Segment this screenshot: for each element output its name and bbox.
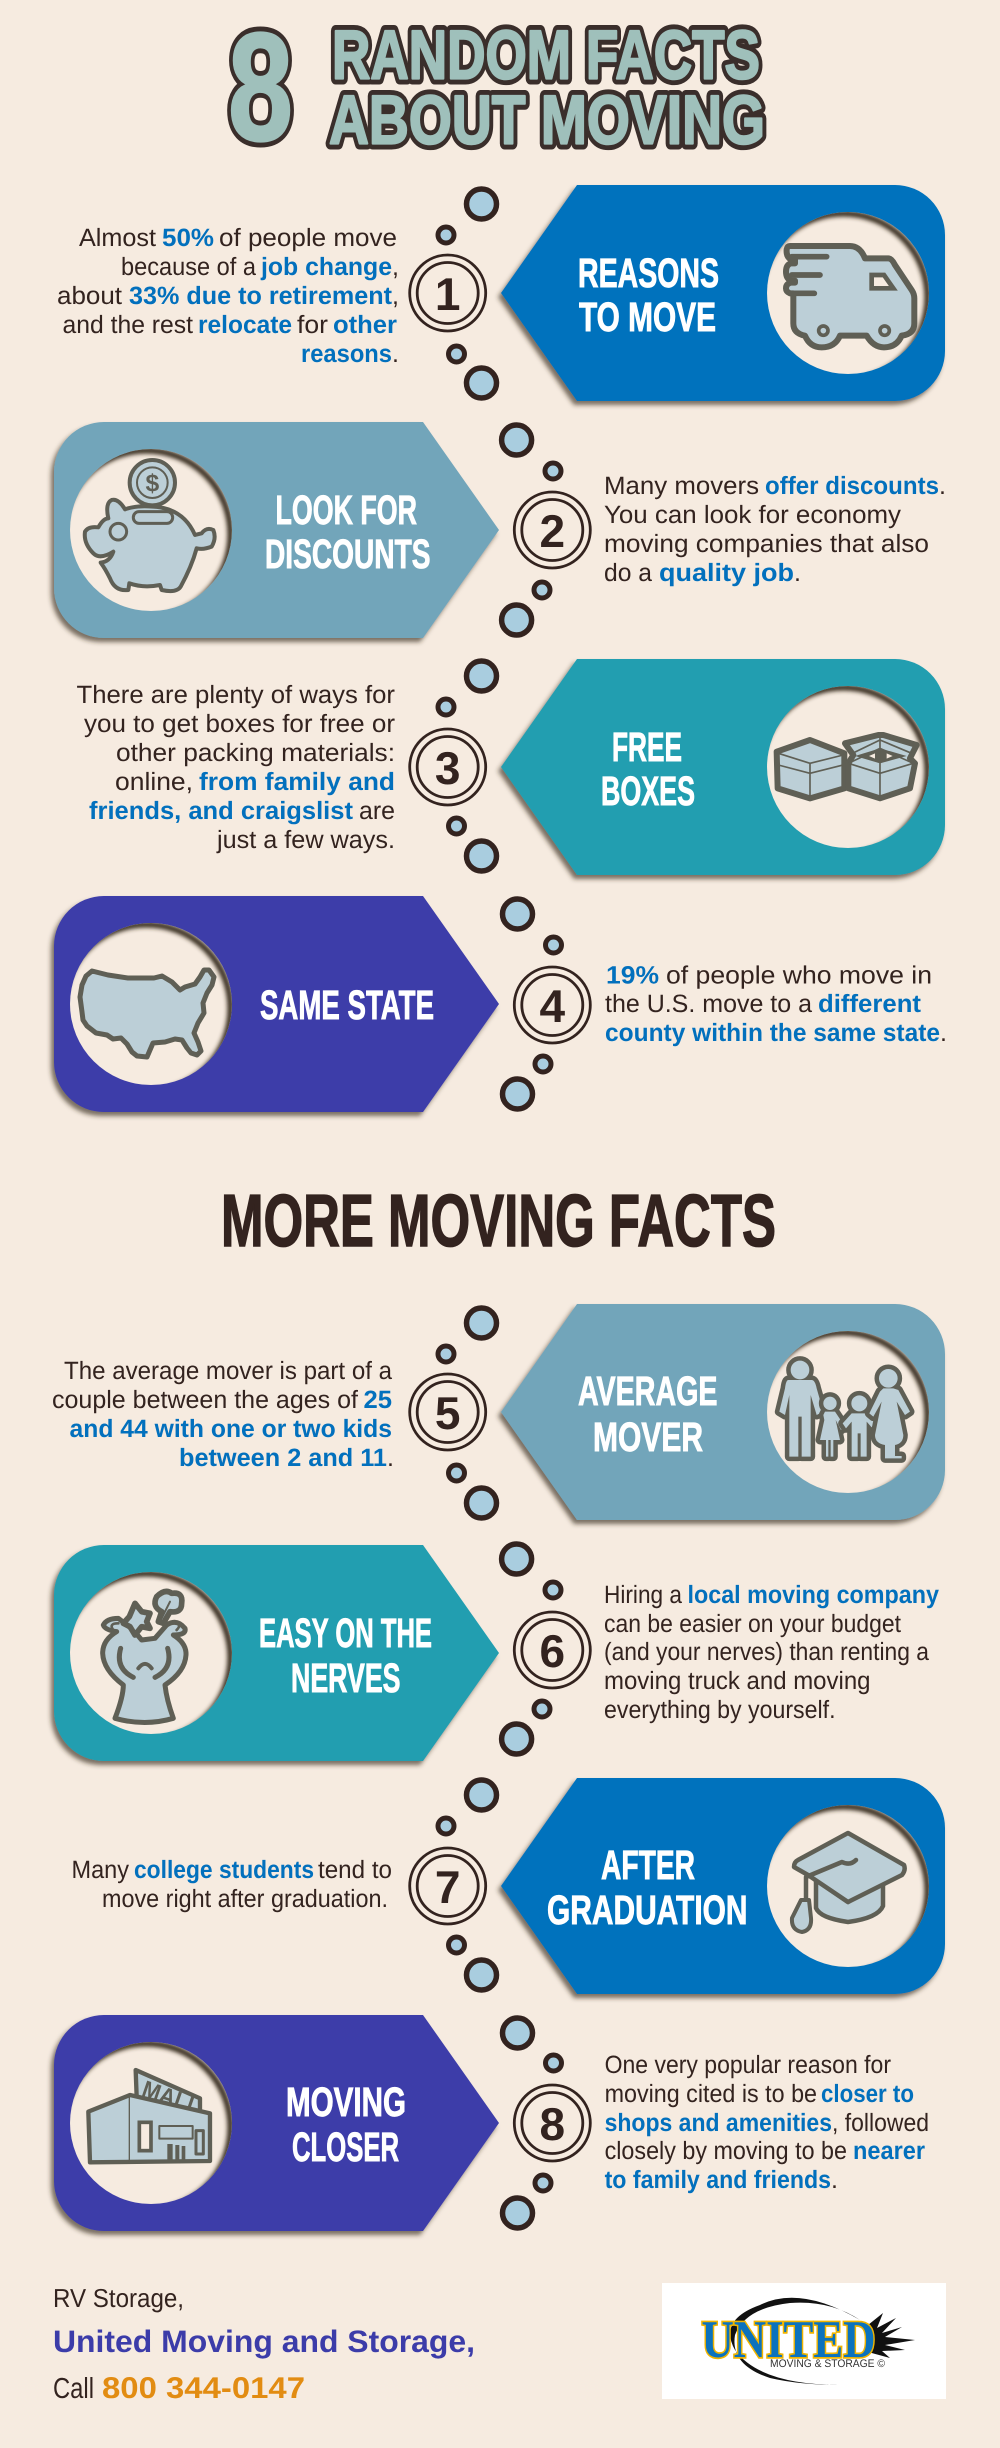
connector bubbles [502, 2018, 562, 2228]
panel heading: TO MOVE [579, 294, 716, 340]
number badge 4: 4 [540, 980, 566, 1032]
text block: You can look for economy [604, 501, 902, 529]
text block: between 2 and 11 [179, 1444, 387, 1472]
text block: moving truck and moving [604, 1667, 870, 1695]
icon: piggy bank: $ [145, 469, 159, 497]
text block: do a [604, 559, 652, 587]
icon: boxes [777, 735, 917, 798]
text block: , [392, 253, 399, 281]
text block: local moving company [688, 1581, 939, 1609]
icon hole [760, 1331, 929, 1500]
text block: quality job [659, 559, 794, 587]
number badge 5: 5 [435, 1387, 460, 1439]
footer contact text: RV Storage, [53, 2283, 184, 2313]
title numeral 8: 8 [228, 1, 293, 173]
text block [604, 1581, 939, 1724]
text block: closely by moving to be [605, 2137, 847, 2165]
connector bubbles [438, 1308, 496, 1518]
text block: relocate [198, 311, 292, 339]
footer contact text: Call [53, 2373, 94, 2405]
text block: moving companies that also [604, 530, 929, 558]
logo: United Moving and Storage: MOVING & STORAGE © [770, 2358, 885, 2370]
logo: United Moving and Storage: UNITED [702, 2311, 876, 2369]
text block: couple between the ages of [52, 1386, 358, 1414]
text block: . [940, 1019, 947, 1047]
icon: mall building: MALL [139, 2075, 204, 2120]
footer contact text: United Moving and Storage, [53, 2324, 475, 2359]
panel heading: BOXES [601, 768, 695, 814]
text block: nearer [853, 2137, 925, 2165]
icon hole [62, 2042, 232, 2212]
icon hole [760, 686, 929, 856]
panel heading [601, 724, 695, 814]
text block: friends, and craigslist [89, 797, 354, 825]
icon: stressed person [103, 1591, 186, 1722]
text block: reasons [301, 340, 392, 368]
connector bubbles [502, 425, 561, 635]
text block [604, 472, 946, 587]
text block: Almost [79, 224, 156, 252]
number badge 2 [514, 492, 590, 568]
number badge 8 [514, 2085, 590, 2161]
text block: 19% [606, 962, 659, 990]
text block: 50% [162, 224, 214, 252]
fact 8: moving closer [54, 2015, 929, 2231]
text block: offer discounts [765, 472, 939, 500]
icon: mall building [88, 2070, 210, 2162]
text block: you to get boxes for free or [84, 710, 395, 738]
fact 3: free boxes [76, 659, 945, 875]
icon hole [62, 449, 232, 618]
number badge 6 [514, 1612, 590, 1688]
text block: and 44 with one or two kids [70, 1415, 392, 1443]
panel heading: GRADUATION [547, 1887, 748, 1933]
text block: (and your nerves) than renting a [604, 1638, 929, 1666]
footer contact text: 800 344-0147 [102, 2372, 305, 2405]
icon hole [62, 1572, 232, 1742]
panel heading: SAME STATE [260, 982, 434, 1028]
icon hole [760, 1805, 929, 1974]
panel heading [286, 2079, 406, 2170]
text block: Many movers [604, 472, 759, 500]
text block: The average mover is part of a [64, 1357, 392, 1385]
text block: to family and friends [605, 2166, 831, 2194]
number badge 1 [410, 255, 486, 331]
panel heading [578, 250, 719, 340]
text block: . [387, 1444, 394, 1472]
number badge 6: 6 [540, 1625, 565, 1677]
icon hole [760, 212, 929, 382]
connector bubbles [438, 661, 496, 871]
text block [605, 2051, 929, 2194]
panel heading [547, 1842, 748, 1933]
text block [52, 1357, 394, 1472]
text block: . [831, 2166, 838, 2194]
text block: move right after graduation. [102, 1885, 388, 1913]
panel: same state [54, 896, 499, 1112]
fact 1: reasons to move [57, 185, 945, 401]
text block: different [818, 990, 922, 1018]
number badge 3 [410, 729, 486, 805]
panel heading [578, 1368, 718, 1460]
text block: the U.S. move to a [605, 990, 812, 1018]
panel: look for discounts [54, 422, 499, 638]
title line 1: RANDOM FACTS [332, 16, 760, 94]
panel: after graduation [501, 1778, 945, 1994]
panel heading [265, 487, 430, 577]
text block: college students [134, 1856, 314, 1884]
fact 6: easy on the nerves [54, 1544, 939, 1761]
icon: piggy bank [85, 460, 215, 591]
logo: United Moving and Storage [662, 2283, 946, 2399]
number badge 1: 1 [435, 268, 460, 320]
panel heading: EASY ON THE [259, 1610, 432, 1656]
text block: Many [72, 1856, 129, 1884]
text block: . [794, 559, 801, 587]
text block: everything by yourself. [604, 1696, 836, 1724]
icon: family [779, 1361, 910, 1458]
connector bubbles [438, 189, 496, 398]
title line 1: RANDOM FACTS [332, 16, 760, 94]
number badge 7 [410, 1848, 486, 1924]
text block: . [392, 340, 399, 368]
text block [72, 1856, 392, 1913]
text block: moving cited is to be [605, 2080, 817, 2108]
panel heading: AVERAGE [578, 1368, 718, 1414]
panel heading: LOOK FOR [276, 487, 417, 533]
text block [76, 681, 395, 854]
text block: One very popular reason for [605, 2051, 891, 2079]
text block: Hiring a [604, 1581, 682, 1609]
text block: 25 [364, 1386, 392, 1414]
text block [605, 962, 947, 1047]
text block: for [297, 311, 328, 339]
connector bubbles [438, 1780, 496, 1990]
connector bubbles [502, 1544, 561, 1754]
text block: from family and [199, 768, 395, 796]
text block: , followed [832, 2109, 929, 2137]
fact 4: same state [54, 896, 947, 1112]
panel: easy on the nerves [54, 1545, 499, 1761]
panel heading: NERVES [291, 1655, 400, 1701]
text block: closer to [821, 2080, 914, 2108]
icon hole [62, 923, 232, 1092]
text block: job change [260, 253, 392, 281]
panel heading: DISCOUNTS [265, 531, 430, 577]
title [228, 1, 765, 173]
text block: county within the same state [605, 1019, 940, 1047]
text block: There are plenty of ways for [76, 681, 395, 709]
text block: other packing materials: [116, 739, 395, 767]
panel heading [259, 1610, 432, 1701]
number badge 5 [410, 1374, 486, 1450]
connector bubbles [502, 899, 562, 1109]
panel: average mover [501, 1304, 945, 1520]
icon: graduation cap [792, 1833, 905, 1932]
panel heading: AFTER [601, 1842, 695, 1888]
number badge 7: 7 [435, 1861, 460, 1913]
text block: are [359, 797, 395, 825]
panel: moving closer [54, 2015, 499, 2231]
text block [57, 224, 399, 368]
text block: and the rest [62, 311, 193, 339]
panel heading: FREE [612, 724, 682, 770]
text block: 33% due to retirement [129, 282, 393, 310]
fact 2: look for discounts [54, 422, 946, 638]
title line 2: ABOUT MOVING [329, 82, 765, 158]
text block: just a few ways. [216, 826, 395, 854]
fact 7: after graduation [72, 1778, 945, 1994]
text block: shops and amenities [605, 2109, 832, 2137]
text block: because of a [121, 253, 256, 281]
panel heading: MOVER [593, 1414, 703, 1460]
panel heading: MOVING [286, 2079, 406, 2125]
text block: tend to [318, 1856, 392, 1884]
text block: about [57, 282, 122, 310]
text block: . [939, 472, 946, 500]
icon: US map [80, 970, 214, 1057]
text block: can be easier on your budget [604, 1610, 901, 1638]
text block: online, [115, 768, 193, 796]
panel: free boxes [501, 659, 945, 875]
number badge 4 [514, 967, 590, 1043]
text block: of people move [219, 224, 397, 252]
number badge 2: 2 [540, 505, 565, 557]
panel heading: CLOSER [292, 2124, 399, 2170]
number badge 8: 8 [540, 2098, 565, 2150]
number badge 3: 3 [435, 742, 460, 794]
text block: , [392, 282, 399, 310]
panel: reasons to move [501, 185, 945, 401]
title numeral 8: 8 [228, 1, 293, 173]
panel heading: REASONS [578, 250, 719, 296]
icon: moving truck [786, 246, 914, 347]
title line 2: ABOUT MOVING [329, 82, 765, 158]
fact 5: average mover [52, 1304, 945, 1520]
text block: of people who move in [666, 962, 932, 990]
text block: other [333, 311, 397, 339]
footer contact text [53, 2283, 475, 2405]
